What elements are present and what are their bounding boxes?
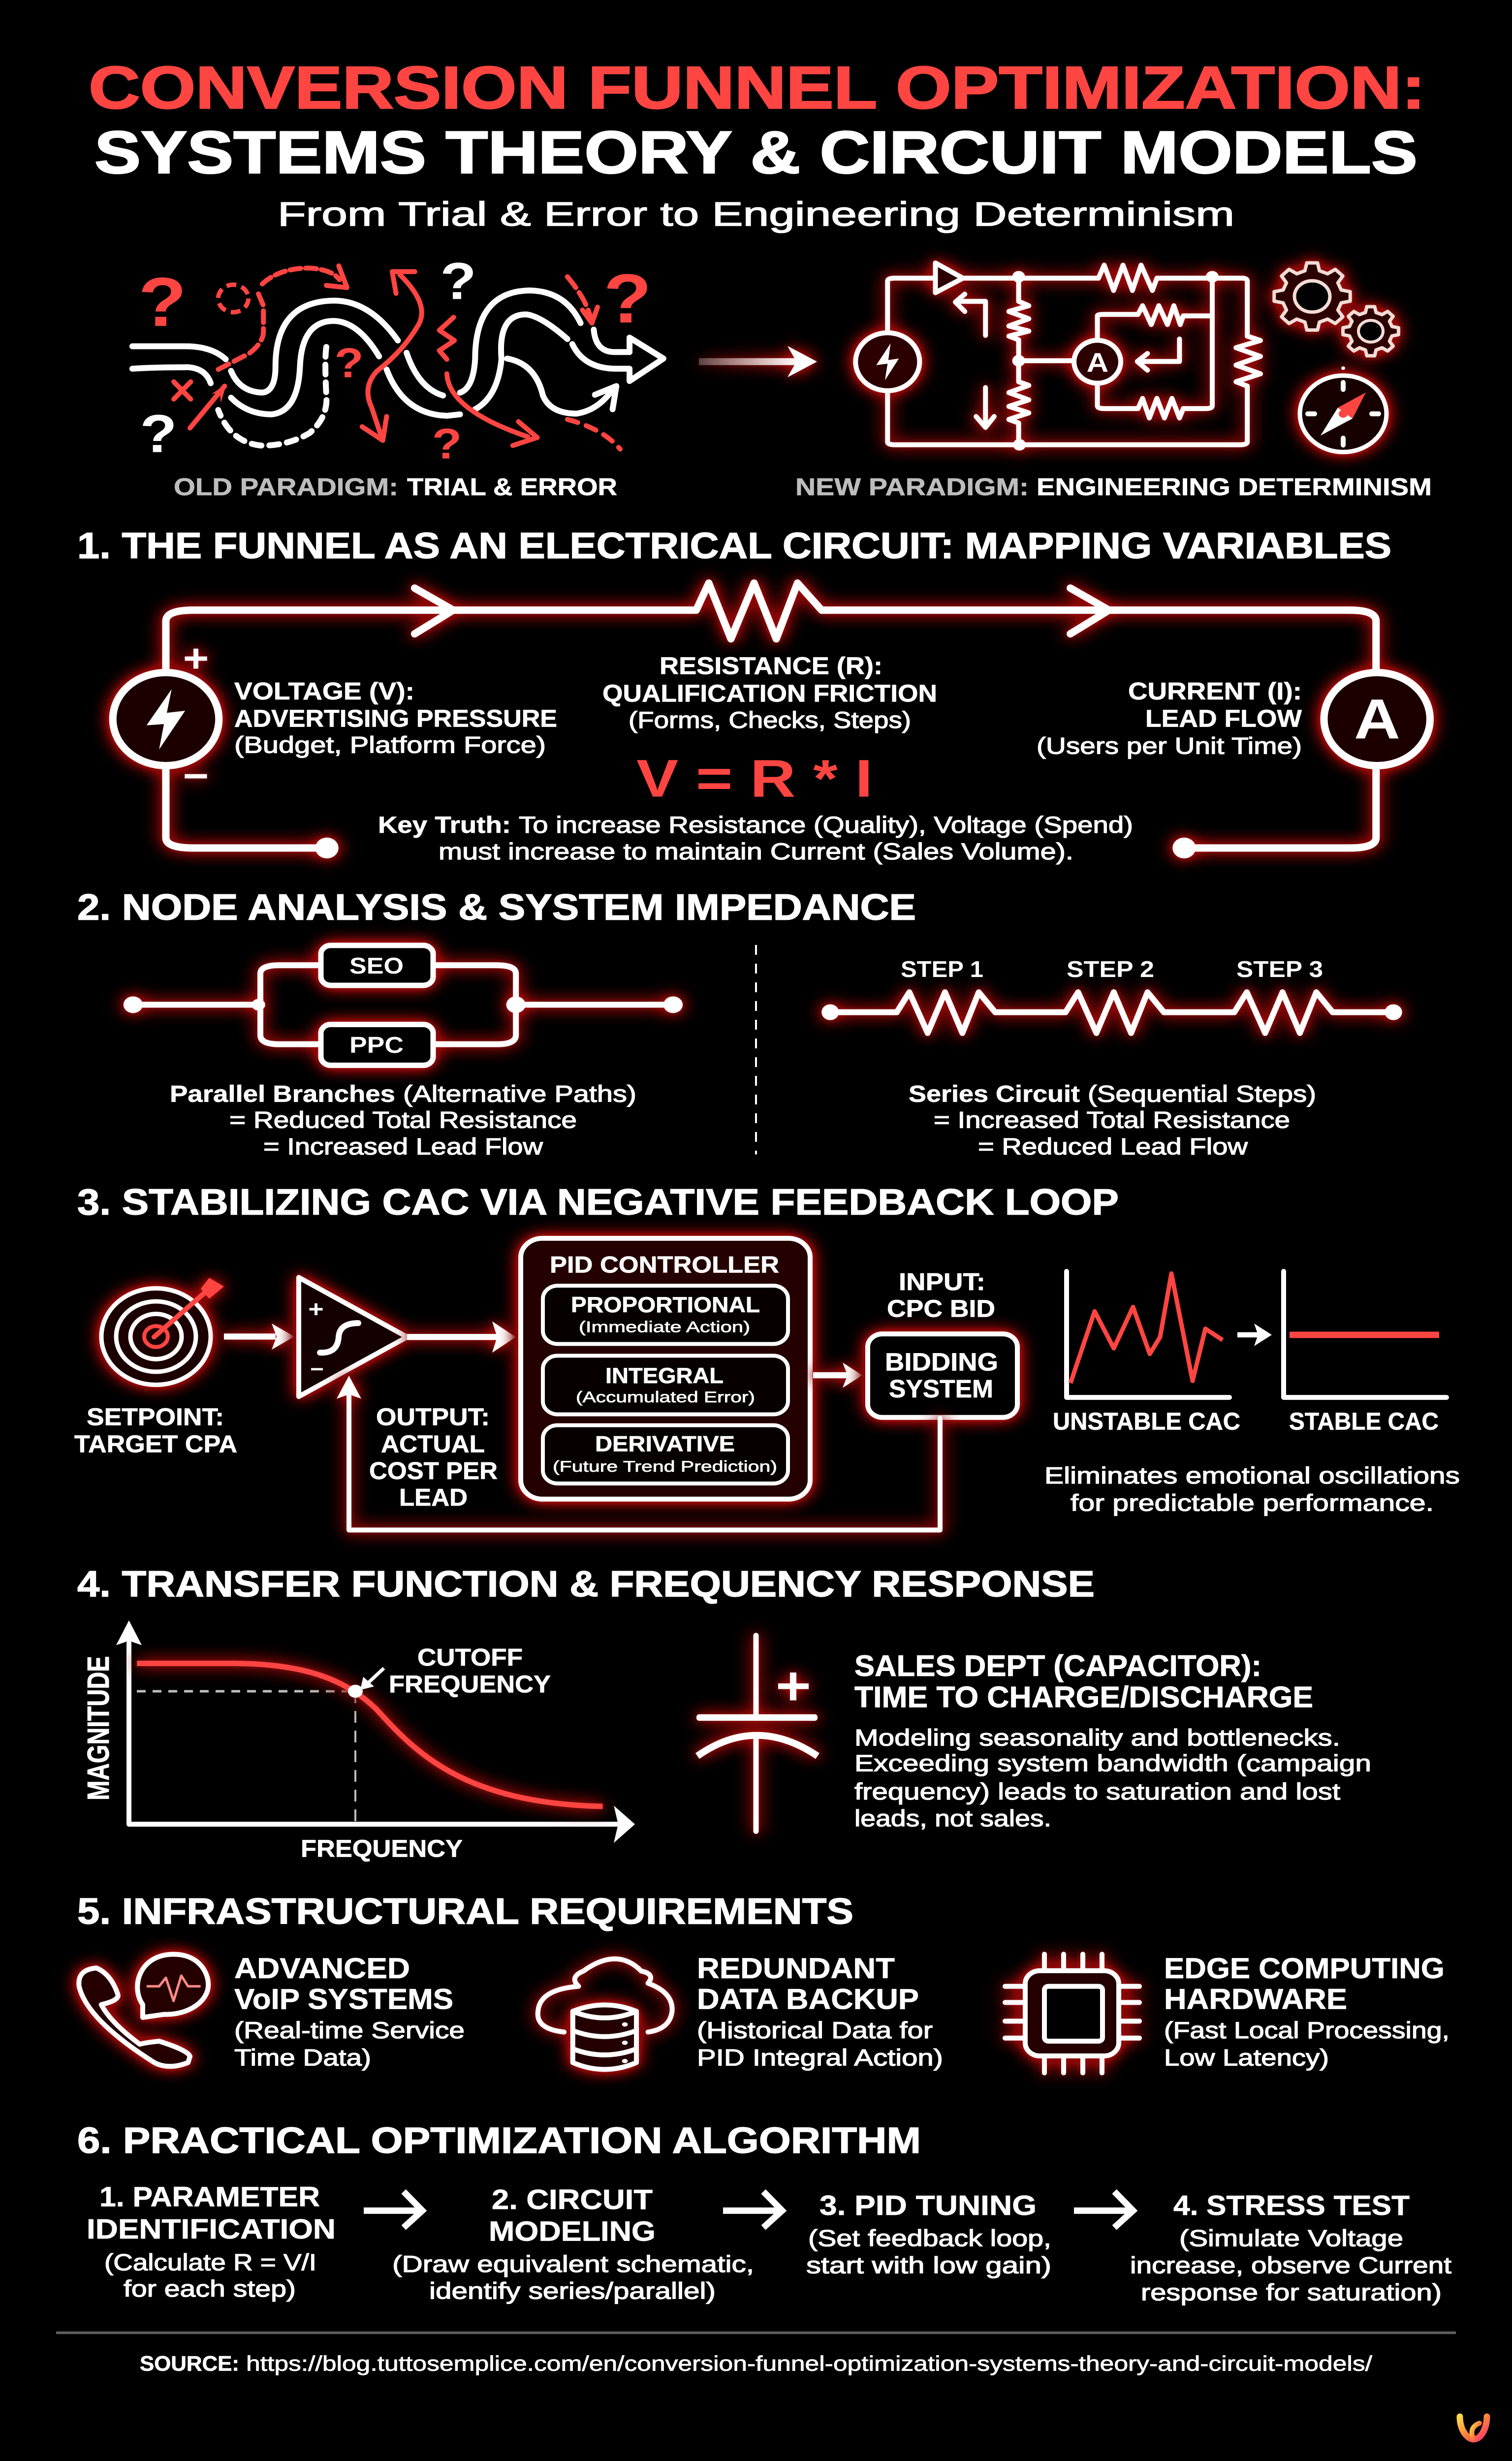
old paradigm label: OLD PARADIGM: <box>174 473 398 501</box>
panel: parallel branches <box>124 946 683 1160</box>
backup text: (Historical Data for <box>697 2017 933 2043</box>
parallel description: Parallel Branches <box>170 1081 395 1107</box>
question marks scattered: ? <box>432 419 462 468</box>
capacitor body: frequency) leads to saturation and lost <box>854 1778 1340 1804</box>
panel: series circuit <box>821 957 1402 1160</box>
step 2 <box>392 2183 754 2304</box>
panel: feedback loop <box>74 1238 1460 1530</box>
series description: (Sequential Steps) <box>1088 1081 1316 1107</box>
capacitor body: leads, not sales. <box>854 1805 1051 1831</box>
series description: = Reduced Lead Flow <box>978 1133 1248 1160</box>
old paradigm label: TRIAL & ERROR <box>407 473 617 501</box>
resistance label: RESISTANCE (R): <box>660 653 882 680</box>
arrow 2 <box>723 2191 782 2228</box>
panel: funnel as a circuit <box>113 583 1430 864</box>
step labels: STEP 1 <box>901 957 983 982</box>
heading: section 4: 4. TRANSFER FUNCTION & FREQUENCY RESPONSE <box>77 1563 1095 1604</box>
voltage label: (Budget, Platform Force) <box>234 731 546 758</box>
step 1: 1. PARAMETER <box>99 2181 320 2212</box>
question marks scattered: ? <box>440 252 476 310</box>
setpoint label: TARGET CPA <box>74 1430 237 1458</box>
capacitor heading: TIME TO CHARGE/DISCHARGE <box>854 1680 1313 1714</box>
title line 2: SYSTEMS THEORY & CIRCUIT MODELS <box>94 119 1418 186</box>
panel: new paradigm circuit schematic <box>855 263 1398 452</box>
capacitor heading <box>854 1649 1313 1714</box>
central branch <box>1009 278 1074 445</box>
chart labels: STABLE CAC <box>1289 1408 1439 1435</box>
backup text: REDUNDANT <box>697 1953 895 1985</box>
parallel description: = Reduced Total Resistance <box>229 1107 577 1133</box>
old paradigm label <box>174 473 617 501</box>
step 4 <box>1130 2190 1451 2305</box>
chart labels <box>1053 1408 1439 1435</box>
feedback arrow <box>337 1376 940 1530</box>
cutoff label <box>389 1644 551 1698</box>
ammeter loop wires <box>1098 278 1212 418</box>
voip text: (Real-time Service <box>234 2017 465 2043</box>
polarity minus: − <box>183 754 209 798</box>
ammeter circle <box>1074 340 1121 383</box>
input label: INPUT: <box>899 1268 985 1295</box>
parallel description <box>170 1081 636 1160</box>
cutoff pointer <box>360 1668 384 1690</box>
resistance label <box>602 653 937 733</box>
paradigm labels <box>174 473 1432 501</box>
proportional box: PROPORTIONAL <box>571 1293 760 1317</box>
voltage source circle <box>113 672 219 766</box>
setpoint label <box>74 1404 237 1458</box>
step 3: 3. PID TUNING <box>819 2190 1037 2221</box>
input label: CPC BID <box>887 1295 995 1323</box>
current label: (Users per Unit Time) <box>1037 732 1302 759</box>
formula: V = R * I <box>636 749 873 808</box>
arrow: unstable to stable <box>1237 1324 1272 1346</box>
parallel description: = Increased Lead Flow <box>263 1133 543 1160</box>
voltage label <box>234 678 557 758</box>
output label: COST PER <box>369 1457 498 1484</box>
capacitor body <box>854 1724 1371 1831</box>
lightning bolt <box>147 689 185 750</box>
backup text: DATA BACKUP <box>697 1984 919 2016</box>
bottom left wire <box>166 765 328 848</box>
arrow: old to new paradigm <box>699 346 817 378</box>
edge text: HARDWARE <box>1164 1984 1347 2016</box>
bidding system box: BIDDING <box>885 1348 998 1376</box>
icon: capacitor <box>696 1636 818 1831</box>
series description: = Increased Total Resistance <box>934 1107 1290 1133</box>
input label <box>887 1268 995 1323</box>
step 1: (Calculate R = V/I <box>104 2249 316 2275</box>
step labels: STEP 2 <box>1067 957 1154 982</box>
step 4: (Simulate Voltage <box>1179 2225 1403 2251</box>
voip text: Time Data) <box>234 2044 371 2071</box>
panel: infrastructure requirements <box>79 1953 1449 2073</box>
current chevrons <box>414 588 1109 634</box>
step 1: IDENTIFICATION <box>87 2213 336 2244</box>
diode triangle <box>936 263 963 293</box>
arrow 3 <box>1074 2191 1133 2228</box>
source line: https://blog.tuttosemplice.com/en/conversion-funnel-optimization-systems-theory-and-circuit-models/ <box>246 2352 1372 2375</box>
resistance label: QUALIFICATION FRICTION <box>602 680 937 707</box>
question marks scattered: ? <box>603 259 652 337</box>
key truth <box>378 812 1133 864</box>
chart caption <box>1044 1462 1460 1516</box>
panel: frequency response chart <box>82 1620 635 1862</box>
capacitor explanation <box>854 1649 1371 1831</box>
proportional box <box>543 1286 788 1344</box>
panel: old paradigm tangled paths <box>132 266 663 449</box>
ammeter circle <box>1324 672 1430 766</box>
output label: OUTPUT: <box>376 1404 490 1431</box>
parallel description: (Alternative Paths) <box>403 1081 636 1107</box>
bidding system box <box>868 1334 1017 1418</box>
arrow 1 <box>364 2191 422 2228</box>
polarity plus: + <box>183 636 209 680</box>
voip text <box>234 1953 465 2071</box>
derivative box <box>543 1425 788 1483</box>
voip text: VoIP SYSTEMS <box>234 1984 453 2016</box>
title line 1: CONVERSION FUNNEL OPTIMIZATION: <box>89 54 1425 121</box>
step 3: start with low gain) <box>806 2252 1051 2278</box>
top wire with resistor <box>166 583 1376 673</box>
capacitor body: Exceeding system bandwidth (campaign <box>854 1750 1371 1776</box>
resistance label: (Forms, Checks, Steps) <box>629 707 911 733</box>
current label <box>1037 678 1302 759</box>
bolt icon <box>876 344 899 380</box>
series description: Series Circuit <box>909 1081 1080 1107</box>
new paradigm label: NEW PARADIGM: <box>795 473 1029 501</box>
white winding funnel paths <box>132 290 663 445</box>
icon: chip <box>1005 1954 1139 2073</box>
question marks scattered: ? <box>138 263 187 341</box>
key truth: To increase Resistance (Quality), Voltage (Spend) <box>519 812 1133 838</box>
edge text: EDGE COMPUTING <box>1164 1953 1445 1985</box>
chart: stable CAC <box>1284 1271 1447 1397</box>
derivative box: (Future Trend Prediction) <box>553 1458 777 1476</box>
chart caption: for predictable performance. <box>1071 1490 1434 1516</box>
PPC box <box>321 1024 433 1065</box>
proportional box: (Immediate Action) <box>579 1319 750 1336</box>
integral box: (Accumulated Error) <box>576 1388 755 1406</box>
step 4: response for saturation) <box>1141 2279 1442 2305</box>
heading: section 6: 6. PRACTICAL OPTIMIZATION ALGORITHM <box>77 2119 921 2161</box>
cutoff guides <box>137 1691 355 1824</box>
icon: cloud with database <box>538 1959 672 2069</box>
step 1: for each step) <box>124 2275 296 2302</box>
title block <box>89 54 1425 233</box>
question marks scattered <box>138 252 652 468</box>
heading: section 5: 5. INFRASTRUCTURAL REQUIREMENTS <box>77 1891 853 1931</box>
junction dots <box>1012 271 1219 450</box>
cutoff point <box>348 1685 363 1698</box>
edge text: Low Latency) <box>1164 2044 1329 2071</box>
setpoint label: SETPOINT: <box>87 1404 224 1431</box>
bottom right wire <box>1186 765 1376 848</box>
compass <box>1300 366 1386 452</box>
integral box <box>543 1356 788 1415</box>
ammeter letter: A <box>1087 347 1108 378</box>
step 2: 2. CIRCUIT <box>492 2183 653 2215</box>
voltage label: VOLTAGE (V): <box>234 678 414 705</box>
capacitor heading: SALES DEPT (CAPACITOR): <box>854 1649 1261 1682</box>
new paradigm label: ENGINEERING DETERMINISM <box>1037 473 1432 501</box>
question marks scattered: ? <box>140 404 177 464</box>
parallel circuit diagram <box>124 946 683 1065</box>
arrow: setpoint to comparator <box>224 1324 294 1350</box>
icon: phone with speech bubble <box>79 1955 208 2066</box>
gears <box>1274 263 1398 356</box>
y-axis label: MAGNITUDE <box>82 1656 116 1800</box>
derivative box: DERIVATIVE <box>595 1431 735 1456</box>
backup text <box>697 1953 943 2071</box>
comparator triangle: − <box>310 1357 324 1381</box>
step 4: increase, observe Current <box>1130 2252 1451 2278</box>
PPC label: PPC <box>349 1033 404 1058</box>
capacitor body: Modeling seasonality and bottlenecks. <box>854 1724 1340 1751</box>
circuit diagram <box>113 583 1430 858</box>
step 2: MODELING <box>489 2215 656 2246</box>
question marks scattered: ? <box>334 340 364 386</box>
comparator triangle: + <box>308 1296 324 1322</box>
PID controller box <box>521 1238 810 1499</box>
subtitle: From Trial & Error to Engineering Determinism <box>278 195 1234 233</box>
heading: section 1: 1. THE FUNNEL AS AN ELECTRICAL CIRCUIT: MAPPING VARIABLES <box>77 525 1391 566</box>
PID outer frame <box>521 1238 810 1499</box>
key truth: must increase to maintain Current (Sales Volume). <box>439 838 1073 864</box>
voip text: ADVANCED <box>234 1953 410 1985</box>
logo <box>1460 2417 1487 2439</box>
SEO label: SEO <box>349 954 404 978</box>
step labels <box>901 957 1323 982</box>
response curve <box>137 1664 602 1806</box>
direction arrows <box>955 294 1179 427</box>
step 2: (Draw equivalent schematic, <box>392 2251 754 2277</box>
comparator triangle <box>299 1277 407 1396</box>
cutoff label: CUTOFF <box>417 1644 523 1671</box>
step 3 <box>806 2190 1051 2278</box>
step labels: STEP 3 <box>1236 957 1323 982</box>
output label: ACTUAL <box>381 1430 485 1458</box>
integral box: INTEGRAL <box>605 1363 724 1388</box>
voltage label: ADVERTISING PRESSURE <box>234 705 557 732</box>
SEO box <box>321 946 433 985</box>
axes <box>116 1620 635 1843</box>
chart caption: Eliminates emotional oscillations <box>1044 1462 1460 1488</box>
PID heading: PID CONTROLLER <box>550 1252 779 1278</box>
key truth: Key Truth: <box>378 812 511 838</box>
main circuit wires <box>887 265 1260 445</box>
step 2: identify series/parallel) <box>429 2278 716 2304</box>
backup text: PID Integral Action) <box>697 2044 943 2071</box>
heading: section 2: 2. NODE ANALYSIS & SYSTEM IMPEDANCE <box>77 886 916 928</box>
current label: CURRENT (I): <box>1128 678 1302 705</box>
red dashed and solid arrows <box>174 266 620 449</box>
icon: target with arrow <box>101 1278 224 1385</box>
series description <box>909 1081 1316 1160</box>
x-axis label: FREQUENCY <box>301 1835 463 1862</box>
source line: SOURCE: <box>140 2352 239 2375</box>
step 1 <box>87 2181 336 2302</box>
edge text: (Fast Local Processing, <box>1164 2017 1449 2043</box>
step 3: (Set feedback loop, <box>808 2225 1051 2251</box>
chart: unstable CAC <box>1067 1271 1229 1397</box>
heading: section 3: 3. STABILIZING CAC VIA NEGATIVE FEEDBACK LOOP <box>77 1181 1119 1222</box>
output label <box>369 1404 498 1511</box>
current label: LEAD FLOW <box>1145 705 1302 732</box>
ammeter letter: A <box>1354 687 1400 751</box>
edge text <box>1164 1953 1449 2071</box>
step 4: 4. STRESS TEST <box>1173 2190 1410 2221</box>
output label: LEAD <box>399 1484 468 1511</box>
new paradigm label <box>795 473 1432 501</box>
source circle <box>855 333 919 391</box>
arrow: PID to bidding <box>813 1362 862 1388</box>
chart labels: UNSTABLE CAC <box>1053 1408 1240 1435</box>
arrow: comparator to PID <box>407 1322 516 1353</box>
series circuit diagram <box>821 992 1402 1033</box>
panel: optimization algorithm steps <box>87 2181 1451 2305</box>
open terminals <box>315 838 1196 858</box>
cutoff label: FREQUENCY <box>389 1671 551 1698</box>
bidding system box: SYSTEM <box>889 1374 993 1403</box>
